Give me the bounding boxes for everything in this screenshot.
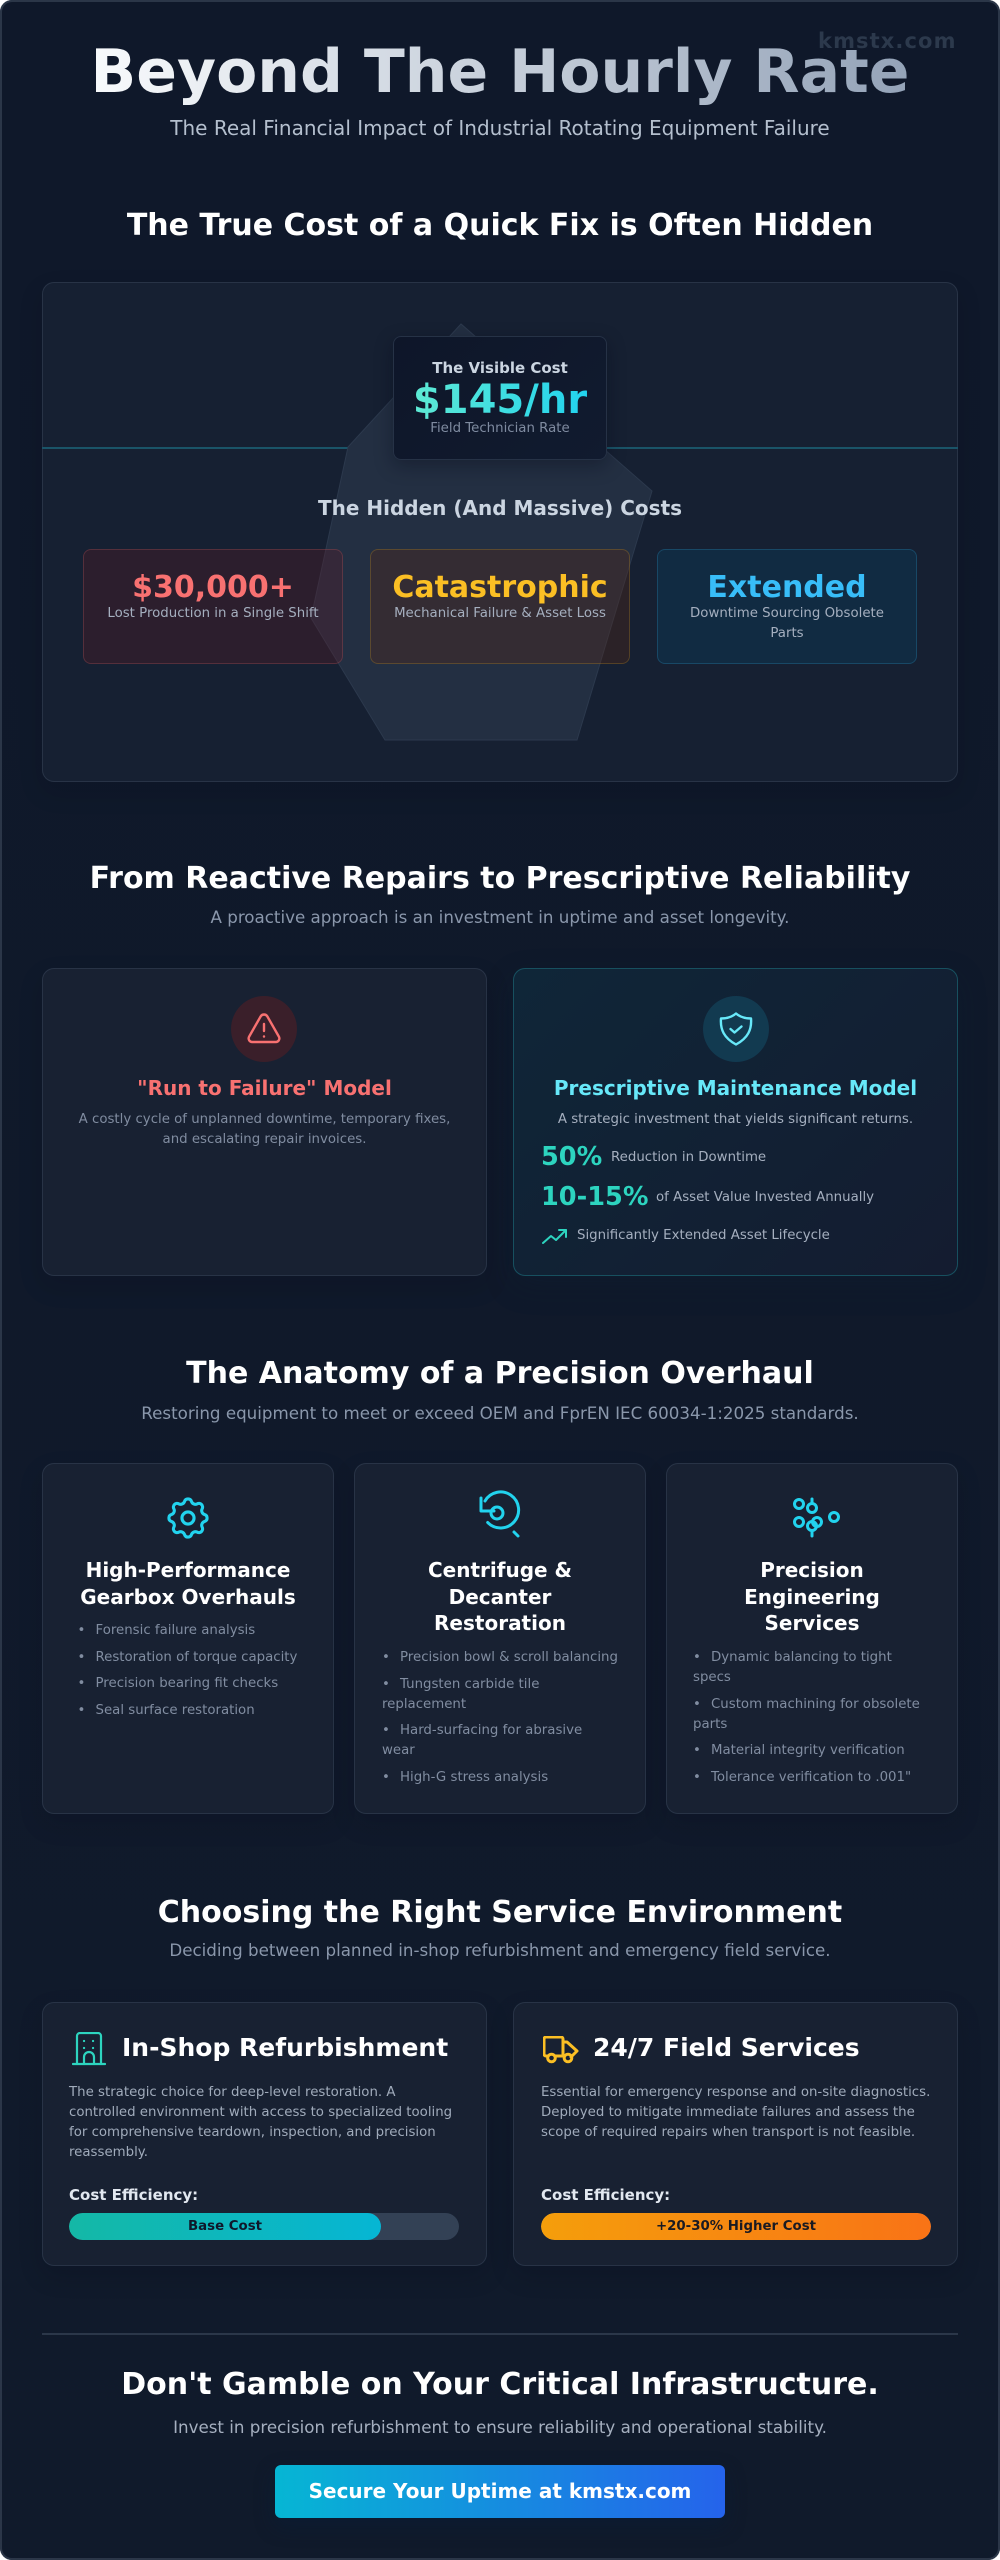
service list: wear [382, 1743, 415, 1758]
panel: field services [513, 2002, 958, 2266]
icon: building [72, 2032, 106, 2066]
card description [78, 1112, 450, 1147]
service list: Dynamic balancing to tight [711, 1650, 892, 1665]
cost efficiency label: Cost Efficiency: [541, 2186, 670, 2204]
waterline [42, 447, 958, 449]
card title: Services [764, 1611, 860, 1635]
caption: Mechanical Failure & Asset Loss [394, 606, 606, 621]
stat label: Reduction in Downtime [611, 1150, 766, 1165]
service list: Precision bearing fit checks [96, 1676, 278, 1691]
service list [78, 1623, 297, 1718]
service list: replacement [382, 1697, 466, 1712]
service list: • [693, 1743, 701, 1758]
card: extended [657, 549, 917, 664]
heading: reactive to prescriptive: From Reactive Repairs to Prescriptive Reliability [90, 861, 910, 896]
stat label: of Asset Value Invested Annually [656, 1190, 874, 1205]
stat: 10-15%: 10-15% [541, 1182, 648, 1212]
card title: Prescriptive Maintenance Model [554, 1076, 917, 1100]
value: Extended [707, 570, 867, 604]
service list: parts [693, 1717, 727, 1732]
visible cost caption: Field Technician Rate [430, 421, 570, 436]
icon: gear [167, 1497, 209, 1539]
description: Deployed to mitigate immediate failures and assess the [541, 2105, 915, 2120]
service list: • [382, 1723, 390, 1738]
panel: prescriptive maintenance [513, 968, 958, 1276]
service list: Custom machining for obsolete [711, 1697, 920, 1712]
visible cost label: The Visible Cost [432, 359, 568, 377]
description [541, 2085, 930, 2140]
service list: • [382, 1770, 390, 1785]
bar chart: base cost [69, 2213, 459, 2240]
icon: precision parts [793, 1498, 840, 1538]
subtitle: The Real Financial Impact of Industrial Rotating Equipment Failure [170, 116, 830, 140]
lifecycle label: Significantly Extended Asset Lifecycle [577, 1228, 830, 1243]
service list: Hard-surfacing for abrasive [400, 1723, 582, 1738]
card title [80, 1558, 296, 1609]
service list: Tolerance verification to .001" [711, 1770, 911, 1785]
card title: Engineering [744, 1585, 880, 1609]
panel: precision engineering [666, 1463, 958, 1814]
section subtitle: Restoring equipment to meet or exceed OEM and FprEN IEC 60034-1:2025 standards. [141, 1403, 859, 1423]
panel: run to failure [42, 968, 487, 1276]
service list: • [78, 1676, 85, 1691]
card: visible cost [393, 336, 607, 460]
heading: call to action: Don't Gamble on Your Critical Infrastructure. [121, 2367, 879, 2402]
service list: Restoration of torque capacity [96, 1650, 297, 1665]
card title: Decanter [449, 1585, 551, 1609]
caption: Parts [770, 626, 804, 641]
card description: A costly cycle of unplanned downtime, temporary fixes, [79, 1112, 450, 1127]
heading: hidden costs: The Hidden (And Massive) Costs [318, 496, 682, 520]
card title: Precision [760, 1558, 864, 1582]
card title: Centrifuge & [428, 1558, 572, 1582]
button: secure your uptime: Secure Your Uptime at kmstx.com [309, 2479, 691, 2503]
service list: Tungsten carbide tile [400, 1677, 539, 1692]
button: secure your uptime [275, 2465, 725, 2518]
stat: 50%: 50% [541, 1142, 602, 1172]
heading: anatomy: The Anatomy of a Precision Overhaul [186, 1356, 814, 1391]
description: Essential for emergency response and on-site diagnostics. [541, 2085, 930, 2100]
service list [382, 1650, 618, 1785]
service list: • [693, 1697, 701, 1712]
card: catastrophic [370, 549, 630, 664]
service list: Precision bowl & scroll balancing [400, 1650, 618, 1665]
icon: truck [543, 2036, 579, 2064]
service list: • [78, 1623, 85, 1638]
value: Catastrophic [392, 570, 608, 604]
panel: iceberg of visible and hidden costs [42, 282, 958, 782]
bar fill [541, 2213, 931, 2240]
card title: In-Shop Refurbishment [122, 2033, 448, 2062]
bar fill: Base Cost [188, 2219, 262, 2234]
icon: shield check [703, 996, 769, 1062]
service list: High-G stress analysis [400, 1770, 548, 1785]
caption [690, 606, 884, 641]
call to action text: Invest in precision refurbishment to ensure reliability and operational stability. [173, 2417, 827, 2437]
icon: warning triangle [231, 996, 297, 1062]
iceberg shape [310, 324, 652, 740]
section subtitle: Deciding between planned in-shop refurbishment and emergency field service. [169, 1940, 831, 1960]
panel: centrifuge restoration [354, 1463, 646, 1814]
card: lost production [83, 549, 343, 664]
heading: true cost: The True Cost of a Quick Fix is Often Hidden [127, 208, 873, 243]
panel: gearbox overhauls [42, 1463, 334, 1814]
title: Beyond The Hourly Rate [91, 37, 909, 107]
heading: service environment: Choosing the Right Service Environment [158, 1895, 842, 1930]
card description: A strategic investment that yields significant returns. [558, 1112, 913, 1127]
panel: in-shop refurbishment [42, 2002, 487, 2266]
card description: and escalating repair invoices. [163, 1132, 366, 1147]
service list: • [78, 1650, 85, 1665]
description: controlled environment with access to specialized tooling [69, 2105, 452, 2120]
description [68, 2085, 452, 2160]
caption: Lost Production in a Single Shift [107, 606, 319, 621]
service list: • [78, 1703, 85, 1718]
service list: • [382, 1650, 390, 1665]
service list: • [382, 1677, 390, 1692]
description: scope of required repairs when transport is not feasible. [541, 2125, 915, 2140]
service list: • [693, 1650, 701, 1665]
caption: Downtime Sourcing Obsolete [690, 606, 884, 621]
card title: Restoration [434, 1611, 566, 1635]
service list [693, 1650, 920, 1785]
card title: Gearbox Overhauls [80, 1585, 296, 1609]
visible cost value: $145/hr [413, 377, 587, 423]
card title: 24/7 Field Services [593, 2033, 860, 2062]
service list: • [693, 1770, 701, 1785]
description: The strategic choice for deep-level restoration. A [69, 2085, 396, 2100]
description: for comprehensive teardown, inspection, and precision [69, 2125, 436, 2140]
watermark: kmstx.com: kmstx.com [818, 29, 957, 53]
service list: specs [693, 1670, 731, 1685]
service list: Material integrity verification [711, 1743, 905, 1758]
cost efficiency label: Cost Efficiency: [69, 2186, 198, 2204]
service list: Seal surface restoration [96, 1703, 255, 1718]
card title: "Run to Failure" Model [137, 1076, 392, 1100]
bar chart: higher cost [541, 2213, 931, 2240]
bar fill: +20-30% Higher Cost [656, 2219, 816, 2234]
bar fill [69, 2213, 381, 2240]
card title [744, 1558, 880, 1635]
section subtitle: A proactive approach is an investment in uptime and asset longevity. [210, 907, 789, 927]
description: reassembly. [69, 2145, 148, 2160]
footer divider [42, 2333, 958, 2335]
icon: rotating bowl [480, 1490, 520, 1538]
icon: trending up [542, 1229, 567, 1244]
card title [428, 1558, 572, 1635]
service list: Forensic failure analysis [96, 1623, 255, 1638]
card title: High-Performance [86, 1558, 290, 1582]
value: $30,000+ [132, 570, 294, 604]
